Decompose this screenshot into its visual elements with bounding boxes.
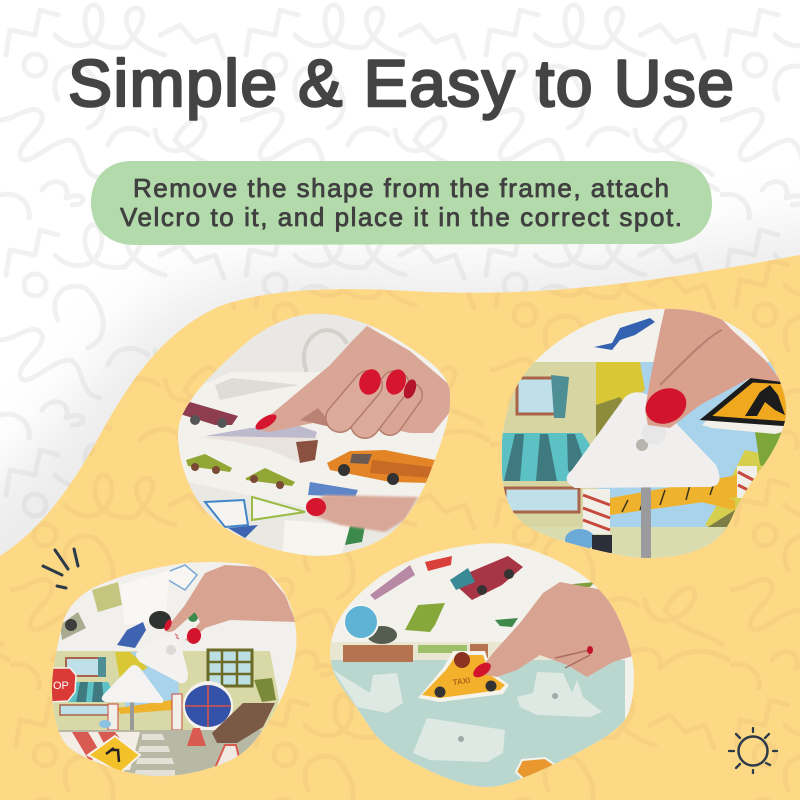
white triangle on board	[102, 665, 163, 703]
stop sign	[50, 668, 76, 702]
street scene window	[517, 375, 569, 418]
photo: attaching velcro dot	[501, 308, 786, 558]
hand	[471, 582, 636, 680]
photo: positioning triangle on board	[52, 562, 296, 776]
striped cone right	[214, 744, 240, 766]
fire truck sticker	[180, 402, 238, 428]
instruction text: Remove the shape from the frame, attach	[133, 173, 669, 203]
panel: yellow backdrop	[0, 255, 800, 800]
no parking sign	[183, 681, 233, 731]
icon: sun	[729, 728, 777, 773]
board	[45, 651, 279, 735]
loose pieces	[60, 565, 198, 648]
tape and posts	[99, 694, 182, 730]
taxi sticker: TAXI	[452, 676, 471, 687]
fire engine sticker	[450, 556, 523, 600]
crosswalk	[134, 734, 175, 776]
balloon piece	[344, 605, 397, 644]
stop sign: OP	[53, 680, 69, 692]
soft shadow above yellow shape	[0, 215, 800, 800]
vehicle silhouettes on board	[333, 670, 602, 762]
lower finger	[306, 495, 418, 532]
roadworks sign	[702, 372, 790, 434]
instruction pill	[91, 161, 712, 245]
photo: peeling shape from frame	[178, 314, 450, 556]
hand	[163, 565, 296, 646]
fingers holding dot	[640, 308, 782, 430]
green building piece	[405, 603, 445, 632]
icon: attention burst	[43, 549, 78, 588]
small truck sticker	[516, 758, 555, 785]
held triangle	[136, 630, 188, 683]
white triangle piece	[567, 392, 720, 488]
caution tape	[610, 475, 740, 515]
green truck stickers	[186, 454, 295, 489]
photo: placing taxi on mint board	[325, 535, 640, 795]
orange dump truck sticker	[327, 450, 435, 485]
instruction text: Velcro to it, and place it in the correct spot.	[120, 202, 682, 232]
yellow turn sign	[88, 736, 140, 773]
brown bush	[212, 703, 275, 743]
sticker at top	[594, 318, 655, 350]
hand	[253, 326, 452, 433]
striped piece	[370, 565, 415, 600]
taxi sticker	[418, 651, 509, 702]
striped post right	[737, 466, 757, 498]
tray pieces	[188, 482, 419, 556]
barrier post	[565, 489, 612, 553]
striped awning	[502, 433, 590, 481]
bottom road	[58, 730, 262, 776]
title: Simple & Easy to Use	[68, 46, 734, 120]
traffic cone	[187, 728, 206, 746]
building windows	[60, 650, 276, 715]
